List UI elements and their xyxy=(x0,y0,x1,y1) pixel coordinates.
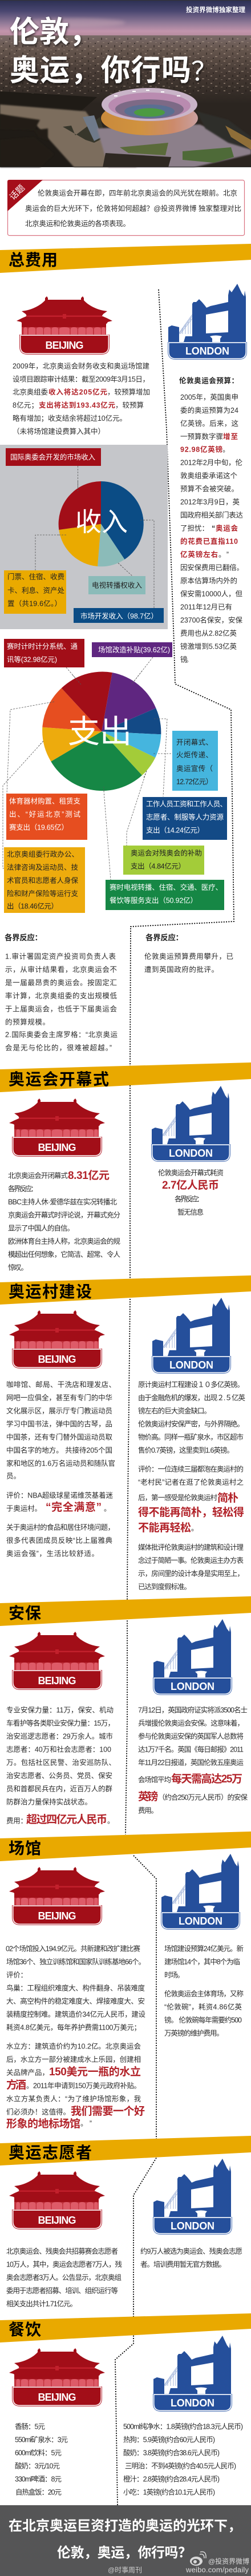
icon: beijing: BEIJING xyxy=(38,1354,76,1365)
text: beijing village: 评价：NBA超级球星诺维茨基着迷 xyxy=(6,1491,113,1499)
text: london village: 得不能再简朴，轻松得 xyxy=(138,1506,244,1519)
label: administration: 术官员和志愿者人身保 xyxy=(7,876,78,885)
text: london budget: 了担忧： xyxy=(180,524,209,532)
text: beijing village: 咖啡馆、邮局、干洗店和理发店、 xyxy=(6,1380,116,1388)
text: beijing venues: 装精度控制难。建筑造价34亿元人民币，建设 xyxy=(6,2010,145,2019)
label: timing systems: 赛时计时计分系统、通 xyxy=(7,642,78,651)
text: london venues: 建场馆14个，其中8个为临 xyxy=(164,1957,240,1966)
text: beijing opening ceremony: 8.31亿元 xyxy=(68,1169,110,1182)
text: beijing village: 中国名字的地方。 共接待205个国 xyxy=(6,1446,112,1455)
text: beijing opening ceremony: 模超出任何想象，它简洁、超常、令人 xyxy=(8,1250,120,1258)
text: london village: 不能再轻松 xyxy=(138,1522,191,1534)
text: beijing village: 网吧一应俱全，甚至有专门的中华 xyxy=(6,1393,112,1402)
label: paralympic subsidy: 奥运会对残奥会的补助 xyxy=(131,848,202,858)
topic box intro: 话题 xyxy=(8,183,27,202)
text: beijing security: 万。包括社区民警、治安巡防队、 xyxy=(6,1758,116,1766)
label: staff costs: 支出（14.24亿元） xyxy=(146,826,204,835)
text: london village: 媒体批评伦敦奥运村的建筑和设计理 xyxy=(138,1543,244,1552)
text: london budget: 亿英镑。后来，这 xyxy=(180,419,238,428)
topic box intro: 伦敦奥运会开幕在即，四年前北京奥运会的风光犹在眼前。北京 xyxy=(38,188,237,198)
text: beijing opening ceremony: 欧洲体育台主持人称，北京奥运会的规 xyxy=(8,1237,120,1246)
text: london opening ceremony: 2.7亿人民币 xyxy=(162,1179,219,1192)
text: london village: 由于金融危机的爆发，出现２.５亿英 xyxy=(138,1393,245,1402)
section heading: volunteers: 奥运志愿者 xyxy=(9,2144,92,2162)
icon: beijing xyxy=(9,1867,105,1925)
icon: beijing: BEIJING xyxy=(38,2392,76,2403)
text: beijing venues: 大、高空构件的稳定难度大、焊接难度大、安 xyxy=(6,1997,145,2005)
text: london venues: 伦敦奥运会主体育场，又称 xyxy=(164,1989,244,1998)
label: services: 赛时电视转播、住宿、交通、医疗、 xyxy=(110,883,222,892)
text: london budget: 委的奥运预算为24 xyxy=(180,406,238,414)
text: beijing volunteers: 奥会志愿者3万人。公告显示，北京奥组 xyxy=(6,2273,122,2281)
icon: london: LONDON xyxy=(185,345,229,357)
section heading: venues xyxy=(0,1832,251,1861)
text: london village: 已达到度假标准。 xyxy=(138,1583,191,1591)
text: beijing budget audit: 支出将达到193.43亿元 xyxy=(39,401,115,409)
text: london village: 念过于简陋一事。伦敦奥运主办方表 xyxy=(138,1556,244,1564)
text: london budget: 2012年3月9日，英 xyxy=(180,498,240,506)
chart: expense pie: 支出 xyxy=(68,714,132,750)
icon: beijing: BEIJING xyxy=(46,340,83,351)
text: london budget: 奥运会 xyxy=(216,524,238,532)
text: beijing security: 超过四亿元人民币 xyxy=(26,1813,107,1826)
text: london venues: 万英镑的维护费用。 xyxy=(164,2029,224,2037)
text: beijing village: 。 xyxy=(104,1505,111,1513)
text: london budget: 原本估算场内外的 xyxy=(180,577,237,585)
text: london budget: 伦敦奥运会预算： xyxy=(179,376,238,385)
text: london reactions xyxy=(144,933,233,974)
text: beijing opening ceremony xyxy=(8,1169,120,1272)
section heading: opening ceremony: 奥运会开幕式 xyxy=(9,1070,109,1088)
section heading: security: 安保 xyxy=(9,1604,41,1622)
text: london opening ceremony: 暂无信息 xyxy=(177,1208,204,1216)
text: london venues xyxy=(164,1945,244,2037)
list: london food prices: 热狗：5.9英镑(约合60元人民币) xyxy=(123,2436,215,2444)
text: beijing opening ceremony: 各界反应： xyxy=(8,1184,38,1193)
text: london volunteers: 者。培训费用暂无官方数据。 xyxy=(140,2260,226,2269)
list: beijing food prices: 550ml矿泉水：3元 xyxy=(15,2436,68,2444)
label: ceremonies: 奥运宣传（ xyxy=(176,764,213,773)
list: london food prices: 小吃：1英镑(约合10.1元人民币) xyxy=(123,2488,215,2496)
text: beijing venues: 们必须办！这值得。 xyxy=(6,2108,70,2116)
text: beijing budget audit: 8亿元； xyxy=(13,401,38,409)
text: beijing budget audit: ，较预算 xyxy=(115,401,144,409)
text: beijing opening ceremony: 京奥运会开幕式时评论说，开幕式充分 xyxy=(8,1210,120,1219)
icon: beijing xyxy=(17,296,112,355)
text: beijing security: 费用： xyxy=(6,1817,27,1825)
text: beijing security xyxy=(6,1706,116,1826)
text: london security xyxy=(138,1706,248,1814)
label: timing systems xyxy=(4,639,84,667)
text: london budget: 国政府相关部门表达 xyxy=(180,510,243,520)
label: marketing revenue xyxy=(74,608,164,623)
icon: london xyxy=(153,2336,232,2412)
label: marketing revenue: 市场开发收入（98.7亿） xyxy=(80,612,158,620)
text: london budget: 因安保费用已翻倍。 xyxy=(180,563,244,572)
label: ceremonies: 12.72亿元） xyxy=(176,778,213,786)
topic box intro: 北京奥运和伦敦奥运的各项表现。 xyxy=(25,219,130,228)
text: beijing reactions: 2.国际奥委会主席罗格：“北京奥运 xyxy=(5,1030,118,1039)
label: staff costs xyxy=(143,797,227,840)
text: london venues: 时场。 xyxy=(164,1971,184,1979)
text: beijing village: 奥运会强”，生活比较舒适。 xyxy=(6,1549,99,1557)
hero photo with title xyxy=(0,0,251,167)
text: beijing budget audit xyxy=(13,362,150,436)
text: london security: 年11月22日报道，英国伦敦五座奥运 xyxy=(138,1758,244,1766)
topic box intro xyxy=(7,180,244,235)
text: london budget: 2005年，英国奥申 xyxy=(180,393,238,401)
label: tickets and others: 卡、利息、资产处 xyxy=(7,586,64,595)
text: london reactions: 伦敦奥运预算费用攀升，已 xyxy=(144,952,233,960)
section heading: total cost: 总费用 xyxy=(9,251,58,269)
icon: beijing xyxy=(9,1310,105,1368)
list: beijing food prices: 香肠：5元 xyxy=(15,2423,45,2431)
label: paralympic subsidy xyxy=(123,846,204,875)
panel: income pie xyxy=(0,445,168,629)
text: london budget: 镑。 xyxy=(180,655,193,663)
text: london budget: 。 xyxy=(222,445,230,453)
text: beijing budget audit: 设项目跟踪审计结果：截至2009年3月15日， xyxy=(13,375,149,384)
text: london opening ceremony: 各界反应： xyxy=(175,1194,204,1204)
section heading: catering xyxy=(0,2313,251,2342)
text: london security: 费用。 xyxy=(138,1806,158,1814)
text: beijing security: 。 xyxy=(107,1817,115,1825)
text: beijing reactions: 于上届奥运会，也低于下届奥运会 xyxy=(5,1005,117,1013)
text: london venues: 场馆建设预算24亿美元。新 xyxy=(164,1945,244,1953)
text: beijing budget audit: 收入将达205亿元 xyxy=(48,388,107,396)
text: london budget: “ xyxy=(212,524,215,532)
section heading: volunteers xyxy=(0,2136,251,2166)
text: beijing village: “完全满意” xyxy=(46,1500,102,1514)
hero title xyxy=(10,16,217,87)
text: london village xyxy=(138,1380,245,1591)
text: beijing venues: 关品牌产品， xyxy=(6,2068,49,2077)
text: london village: 示，房间里的设计本身是实用至上， xyxy=(138,1569,244,1578)
icon: beijing: BEIJING xyxy=(38,1675,76,1687)
text: london village: 评价：一位连续三届都泡在奥运村的 xyxy=(138,1465,244,1473)
text: beijing volunteers: 委用于志愿者招募、培训、组织运行等 xyxy=(6,2286,118,2295)
text: london volunteers: 约9万人被选为奥运会、残奥会志愿 xyxy=(140,2247,242,2255)
icon: beijing xyxy=(9,1098,105,1157)
label: venue subsidies xyxy=(92,642,172,657)
hero title: 奥运，你行吗 xyxy=(10,54,191,87)
text: beijing venues: 场馆36个、独立训练馆和国家队训练基地66个。 xyxy=(6,1957,145,1966)
text: beijing village: 于奥运村。 xyxy=(6,1505,42,1513)
text: london budget: 增至 xyxy=(223,432,238,441)
text: london village: “老村民”记者在逛了伦敦奥运村之 xyxy=(138,1478,244,1487)
text: london village: 。 xyxy=(191,1524,199,1532)
text: beijing venues: 水立方某负责人：“为了维护场馆形象，我 xyxy=(6,2094,141,2103)
text: london security: 7月12日，英国政府证实将派3500名士 xyxy=(138,1706,248,1714)
text: beijing security: 员和首都民兵在内，近百万人的群 xyxy=(6,1785,112,1793)
footer banner: 在北京奥运巨资打造的奥运的光环下， xyxy=(9,2518,241,2534)
text: beijing venues: 水立方：建筑造价约为10.2亿。北京奥运会 xyxy=(6,2042,141,2051)
text: beijing security: 专业安保力量：11万，保安、机动 xyxy=(6,1706,114,1714)
label: ceremonies xyxy=(172,731,218,791)
section heading: security xyxy=(0,1596,251,1626)
text: beijing security: 治安巡逻志愿者：29万余人。城市 xyxy=(6,1732,113,1740)
text: beijing reactions xyxy=(5,933,118,1052)
label: sports equipment: 体育器材购置、租赁支 xyxy=(9,797,80,805)
text: beijing budget audit: 略有增加；收支结余将超过10亿元。 xyxy=(13,414,127,422)
footer banner xyxy=(0,2505,251,2576)
text: london budget: 亿英镑左右 xyxy=(180,550,218,558)
text: beijing budget audit: （未将场馆建设费算入其中） xyxy=(13,427,105,436)
topic box intro: 奥运会的巨大光环下，伦敦将如何超越？@投资界微博 独家整理对比 xyxy=(25,204,241,212)
icon: london: LONDON xyxy=(169,1359,213,1371)
list: london food prices: 三明治：不到4英镑(约合40.5元人民币) xyxy=(125,2462,236,2470)
text: london security: 兵增援伦敦奥运会安保。这意味着， xyxy=(138,1718,244,1728)
text: beijing village: 学习中国书法，弹中国的古琴，品 xyxy=(6,1419,112,1428)
label: sports equipment: 出、“好运北京”测试 xyxy=(9,810,80,819)
icon: london: LONDON xyxy=(179,1915,222,1927)
text: beijing venues: 150美元一瓶的水立 xyxy=(49,2065,141,2078)
label: tickets and others: 置（共19.6亿。） xyxy=(7,599,62,607)
label: tickets and others: 门票、住宿、收费 xyxy=(7,572,64,581)
text: london budget: 2012年2月中旬，伦 xyxy=(180,458,242,467)
text: beijing opening ceremony: 惊叹。 xyxy=(8,1263,28,1272)
text: london budget: 敦奥组委承诺这个 xyxy=(180,472,237,480)
text: london volunteers xyxy=(140,2247,242,2269)
label: TV rights: 电视转播权收入 xyxy=(92,581,142,589)
text: beijing village: 中国茶，还有专门替外国运动员取 xyxy=(6,1433,112,1441)
label: timing systems: 讯等(32.98亿元) xyxy=(7,655,57,663)
text: beijing security: 治安志愿者、公务员、党员、保安 xyxy=(6,1771,112,1780)
icon: beijing xyxy=(9,2348,105,2406)
icon: london: LONDON xyxy=(171,2220,214,2232)
text: beijing volunteers: 相关支出共计1.71亿元。 xyxy=(6,2300,77,2308)
text: london opening ceremony: 伦敦奥运会开幕式耗资 xyxy=(158,1168,224,1177)
dotted divider between Beijing and London columns xyxy=(115,289,234,2505)
icon: beijing: BEIJING xyxy=(38,2215,76,2226)
text: beijing reactions: 1.审计署固定资产投资司负责人表 xyxy=(5,952,116,960)
section heading: total cost xyxy=(0,244,251,273)
icon: london: LONDON xyxy=(171,1681,214,1692)
label: tickets and others xyxy=(4,570,66,614)
chart: expense pie xyxy=(39,671,161,791)
text: london budget: 的花费已直指110 xyxy=(180,537,238,546)
text: beijing volunteers: 10万人，其中，奥运会志愿者7万人，残 xyxy=(6,2260,122,2269)
footer banner: @投资界微博 xyxy=(208,2557,249,2566)
label: staff costs: 工作人员工资和工作人员、 xyxy=(146,800,227,808)
text: london budget: 23700名保安，安保 xyxy=(180,615,242,625)
text: london budget xyxy=(179,376,244,663)
label: venue subsidies: 场馆改造补贴(39.62亿) xyxy=(98,645,170,654)
label: paralympic subsidy: 支出（4.84亿元） xyxy=(131,862,185,870)
text: london reactions: 遭到英国政府的批评。 xyxy=(144,965,218,974)
icon: beijing: BEIJING xyxy=(38,1910,76,1922)
label: administration: 法律咨询及运动员、技 xyxy=(7,863,78,871)
text: beijing reactions: 示，从审计结果看，北京奥运会不 xyxy=(5,965,117,974)
icon: london xyxy=(152,1298,231,1374)
text: beijing opening ceremony: 显示了中国人的自信。 xyxy=(8,1224,74,1232)
icon: london xyxy=(161,1854,240,1930)
text: beijing venues: 鸟巢：工程组织难度大、构件翻身、吊装难度 xyxy=(6,1983,145,1993)
footer banner: 伦敦，奥运，你行吗？ xyxy=(57,2545,192,2561)
text: london village: 镑左右的巨大资金缺口。 xyxy=(138,1407,211,1415)
label: services: 餐饮等服务支出（50.92亿） xyxy=(110,896,197,904)
chart: income pie: 收入 xyxy=(75,507,128,537)
list: london food prices: 橙汁：2.8英镑(约合28.4元人民币) xyxy=(123,2474,220,2484)
text: london venues: “伦敦碗”，耗资4.86亿英 xyxy=(164,2003,242,2011)
section heading: olympic village xyxy=(0,1275,251,1305)
text: beijing venues xyxy=(6,1945,145,2130)
label: administration: 出（18.46亿元） xyxy=(7,902,58,910)
hero credit: 投资界微博独家整理 xyxy=(186,6,245,14)
text: beijing security: 防群治力量保持实战状态。 xyxy=(6,1797,92,1806)
text: beijing budget audit: 北京奥组委 xyxy=(13,388,48,396)
list: beijing food prices: 自热盒饭：20元 xyxy=(15,2488,62,2496)
list: beijing food prices: 酸奶：3元/10元 xyxy=(15,2462,60,2470)
label: ceremonies: 开闭幕式、 xyxy=(176,739,213,747)
icon: london xyxy=(151,1086,230,1162)
text: beijing reactions: 的预算规模。 xyxy=(5,1017,50,1027)
text: beijing budget audit: ，较预算增加 xyxy=(107,388,150,396)
icon: london: LONDON xyxy=(169,1148,213,1159)
text: beijing venues: 我们需要一个好 xyxy=(71,2105,145,2118)
section heading: olympic village: 奥运村建设 xyxy=(9,1283,92,1301)
text: london budget: 。” xyxy=(218,550,229,558)
text: london budget: 一预算数字骤 xyxy=(180,432,223,441)
list: beijing food prices: 600ml饮料：5元 xyxy=(15,2449,62,2457)
panel: expense pie xyxy=(3,639,227,913)
icon: london: LONDON xyxy=(171,2397,214,2409)
icon: weibo logo xyxy=(190,2551,206,2566)
text: beijing venues: 方酒 xyxy=(6,2078,26,2091)
text: beijing venues: 后，水立方一部分被建成水上乐园，创建相 xyxy=(6,2055,141,2063)
text: beijing security: 志愿者：40万和社会志愿者：100 xyxy=(6,1745,111,1754)
text: london village: 伦敦奥运村安保严密，与外界隔绝。 xyxy=(138,1419,244,1428)
text: london budget: 保安需10000人，但 xyxy=(180,589,242,598)
text: london budget: 92.98亿英镑 xyxy=(180,445,222,453)
text: beijing volunteers: 北京奥运会、残奥会共招募赛会志愿者 xyxy=(6,2247,118,2255)
icon: london xyxy=(153,1619,232,1695)
text: london opening ceremony xyxy=(158,1168,224,1216)
text: london budget: 预算不会被突破。 xyxy=(180,484,238,493)
text: beijing venues: 02个场馆投入194.9亿元。共新建和改扩建比赛 xyxy=(6,1945,140,1953)
chart: income pie xyxy=(57,481,148,566)
label: sports equipment: 赛支出（19.65亿） xyxy=(9,823,68,831)
icon: beijing xyxy=(9,2171,105,2229)
text: beijing reactions: 会是无与伦比的，很难被超越。” xyxy=(5,1044,112,1052)
text: beijing venues: 评价： xyxy=(6,1971,27,1979)
text: london venues: 镑。 伦敦碗每年需要约500 xyxy=(164,2015,242,2024)
list: london food prices xyxy=(123,2422,243,2496)
text: london security: 达1万7千名。英国《每日邮报》2011 xyxy=(138,1745,244,1754)
text: beijing security: 车看护等各类职业安保力量：15万， xyxy=(6,1718,115,1728)
text: london budget: 镑激增到5.53亿英 xyxy=(180,642,237,651)
text: beijing opening ceremony: BBC主持人休·爱德华兹在实况转播北 xyxy=(8,1198,117,1206)
text: beijing village: 关于奥运村的食品和居住环境问题， xyxy=(6,1523,115,1531)
label: IOC market revenue xyxy=(6,448,101,466)
section heading: catering: 餐饮 xyxy=(9,2321,41,2338)
list: beijing food prices: 330ml啤酒：8元 xyxy=(15,2474,62,2484)
text: london village: 原计奥运村工程建设１０多亿英镑。 xyxy=(138,1380,244,1388)
text: london reactions: 各界反应： xyxy=(145,933,183,942)
hero title: 伦敦， xyxy=(10,16,99,49)
text: beijing reactions: 率计算，北京奥组委的支出规模低 xyxy=(5,991,117,1000)
text: london village: 售价0.7英镑，这里卖到1.6英镑。 xyxy=(138,1446,234,1455)
hero title: ？ xyxy=(191,57,217,86)
text: london village: 后，第一感受是伦敦奥运村 xyxy=(138,1494,217,1502)
text: beijing venues: 。2011年申请到150万美元政府补贴。 xyxy=(26,2082,141,2090)
label: sports equipment xyxy=(6,794,87,840)
label: administration xyxy=(4,847,85,913)
text: beijing village xyxy=(6,1380,116,1557)
text: beijing village: 员。 xyxy=(6,1472,21,1480)
icon: london xyxy=(168,284,247,360)
text: london security: 会场馆平均 xyxy=(138,1776,171,1784)
section heading: venues: 场馆 xyxy=(9,1840,41,1857)
text: london budget: 2011年12月已有 xyxy=(180,603,232,611)
list: london food prices: 酸奶：3.8英镑(约合38.6元人民币) xyxy=(123,2448,220,2457)
text: beijing budget audit: 2009年，北京奥运会财务收支和奥运场馆建 xyxy=(13,362,149,370)
text: beijing reactions: 是一届最昂贵的奥运会。按固定汇 xyxy=(5,979,117,987)
text: beijing reactions: 各界反应： xyxy=(5,933,42,942)
icon: beijing: BEIJING xyxy=(38,1142,76,1153)
label: ceremonies: 火炬传递、 xyxy=(176,750,213,759)
footer banner: @时事周刊 xyxy=(108,2566,142,2574)
label: IOC market revenue: 国际奥委会开发的市场收入 xyxy=(10,453,95,461)
text: beijing village: 家和地区的1.6万名运动员和随队官 xyxy=(6,1459,115,1467)
label: administration: 北京奥组委行政办公、 xyxy=(7,850,79,859)
text: beijing opening ceremony: 北京奥运会开闭幕式 xyxy=(8,1172,68,1180)
footer banner: weibo.com/pedaily xyxy=(185,2566,249,2574)
section heading: opening ceremony xyxy=(0,1062,251,1092)
text: beijing village: 很多代表团成员反映“比上届雅典 xyxy=(6,1536,112,1545)
icon: london xyxy=(153,2159,232,2235)
label: administration: 险和财产保险等运行支 xyxy=(7,889,78,897)
text: london budget: 费用也从2.82亿英 xyxy=(180,629,237,637)
text: london security: （约合250万元人民币）的安保 xyxy=(158,1793,248,1802)
stadium xyxy=(101,88,198,135)
text: london security: 参与伦敦奥运安保的英国军人总数将 xyxy=(138,1732,244,1740)
icon: beijing xyxy=(9,1632,105,1690)
text: london village: 简朴 xyxy=(217,1492,238,1504)
text: london village: 物价高。同样一瓶矿泉水，市区超市 xyxy=(138,1433,244,1441)
text: beijing venues: 形象的地标场馆 xyxy=(6,2117,80,2130)
text: beijing volunteers xyxy=(6,2247,122,2308)
list: london food prices: 500ml纯净水：1.8英镑(约合18.3元人民币) xyxy=(123,2422,243,2431)
label: TV rights xyxy=(88,576,145,594)
label: staff costs: 志愿者、制服等人力资源 xyxy=(146,813,224,821)
text: beijing venues: 。” xyxy=(80,2119,92,2127)
text: london security: 每天需高达25万 xyxy=(171,1772,242,1785)
text: london security: 英镑 xyxy=(138,1790,158,1803)
text: beijing venues: 耗资4.8亿美元，每年养护费需1100万美元； xyxy=(6,2023,141,2031)
text: beijing village: 文化展示区，展示厅专门教运动员 xyxy=(6,1407,112,1415)
label: services xyxy=(106,880,224,910)
list: beijing food prices xyxy=(15,2423,68,2496)
